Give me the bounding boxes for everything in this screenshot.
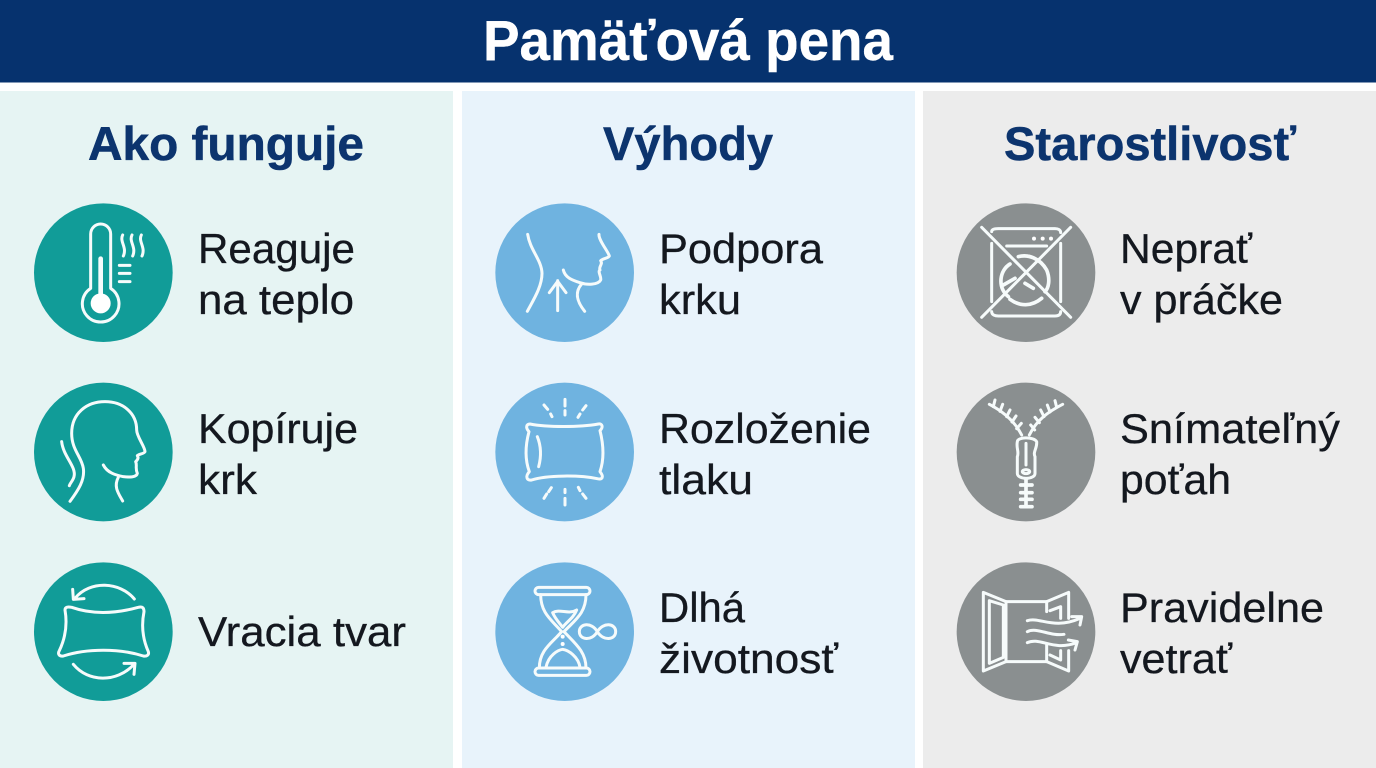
title: Pamäťová pena [483,9,894,73]
text: Pravidelne vetrať [1120,584,1324,682]
panel: Starostlivosť [923,91,1376,768]
text: Podpora krku: Podpora [659,225,824,272]
text: Dlhá životnosť: Dlhá [659,584,746,631]
text: Vracia tvar: Vracia tvar [198,608,406,655]
text: Rozloženie tlaku: Rozloženie [659,405,871,452]
panel: Výhody [462,91,915,768]
text: Reaguje na teplo [198,225,355,323]
icon: pillow with rotating arrows [34,562,173,701]
panel: Ako funguje [0,91,453,768]
icon: hourglass with infinity [495,562,634,701]
icon: zipper [957,383,1095,521]
icon: crossed-out washing machine [957,203,1095,342]
text: Snímateľný poťah: Snímateľný [1120,405,1340,452]
icon: head and neck [34,383,173,521]
text: Reaguje na teplo: na teplo [198,276,354,323]
text: Neprať v práčke: v práčke [1120,276,1283,323]
icon: open window with airflow [957,562,1095,701]
text: Podpora krku [659,225,824,323]
text: Neprať v práčke: Neprať [1120,225,1253,272]
heading: Výhody: Výhody [603,117,773,170]
text: Kopíruje krk: Kopíruje [198,405,358,452]
text: Rozloženie tlaku: tlaku [659,456,753,503]
heading: Ako funguje: Ako funguje [88,117,364,170]
heading: Starostlivosť: Starostlivosť [1004,117,1296,170]
text: Dlhá životnosť [659,584,839,682]
text: Reaguje na teplo: Reaguje [198,225,355,272]
text: Snímateľný poťah [1120,405,1340,503]
text: Kopíruje krk [198,405,358,503]
icon: pillow pressure [495,383,634,521]
text: Pravidelne vetrať: Pravidelne [1120,584,1324,631]
text: Rozloženie tlaku [659,405,871,503]
text: Kopíruje krk: krk [198,456,258,503]
title banner [0,0,1376,82]
text: Pravidelne vetrať: vetrať [1120,635,1233,682]
icon: neck support [495,203,634,342]
text: Snímateľný poťah: poťah [1120,456,1231,503]
text: Podpora krku: krku [659,276,741,323]
text: Dlhá životnosť: životnosť [659,635,839,682]
text: Neprať v práčke [1120,225,1283,323]
icon: thermometer [34,203,173,342]
